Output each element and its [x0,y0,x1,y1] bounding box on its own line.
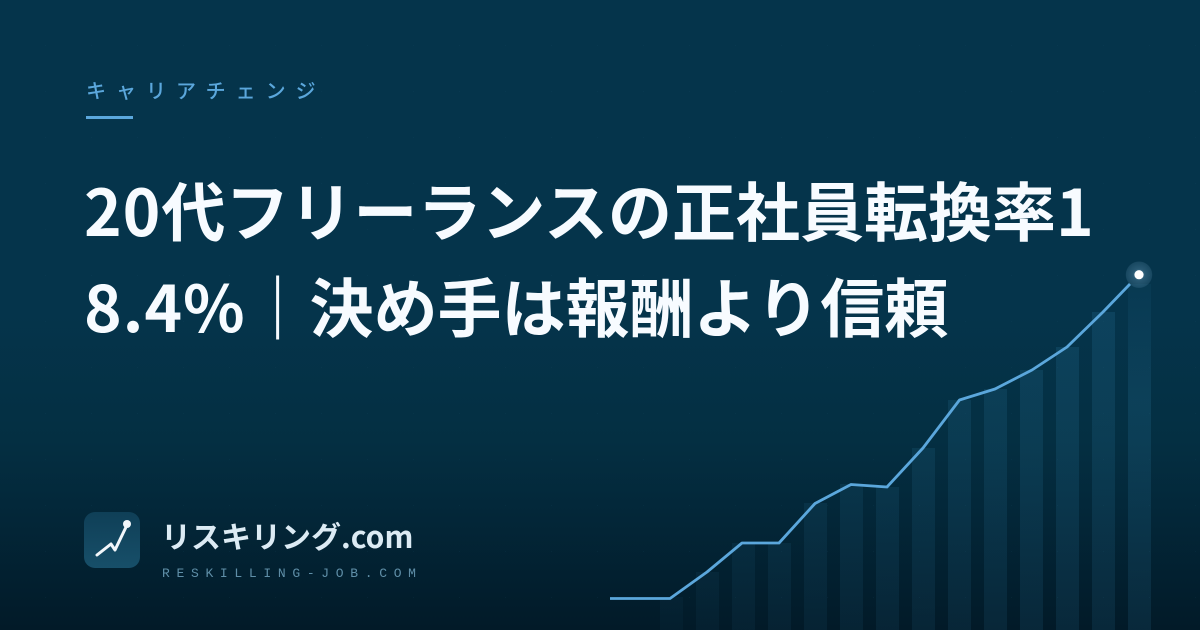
brand url: RESKILLING-JOB.COM [162,566,423,581]
title: 20代フリーランスの正社員転換率1 [84,163,1095,255]
logo icon [84,512,140,568]
brand name: リスキリング.com [161,513,413,557]
title [84,163,1095,351]
category label: キャリアチェンジ [86,75,326,104]
end point marker [1126,261,1152,288]
title: 8.4%｜決め手は報酬より信頼 [84,259,948,351]
bars [660,284,1151,630]
line [610,284,1130,598]
category underline [86,116,133,119]
